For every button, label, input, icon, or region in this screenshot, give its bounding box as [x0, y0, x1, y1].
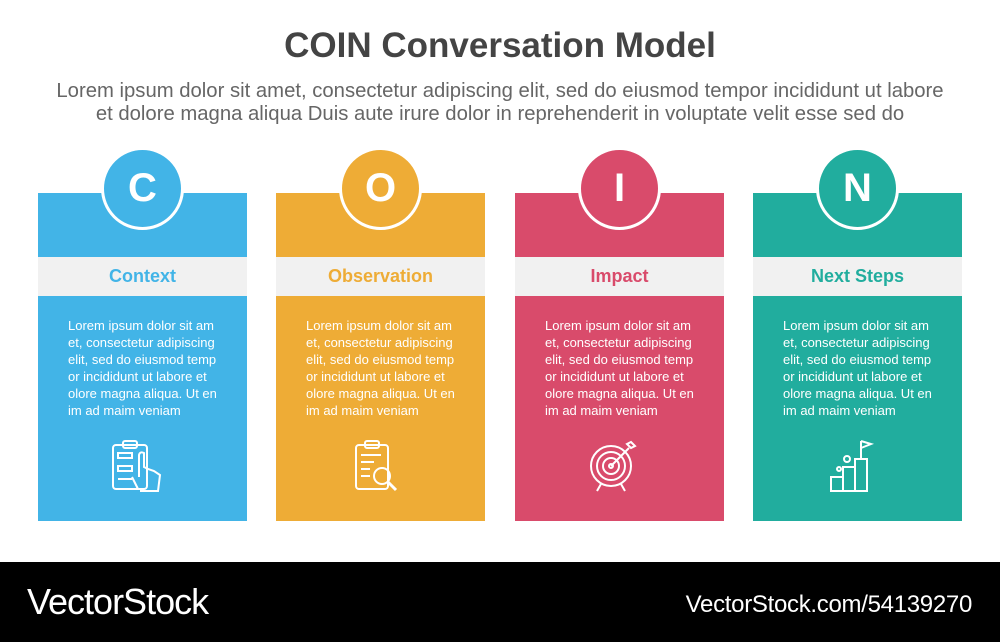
label: Next Steps: Next Steps: [811, 266, 904, 286]
circle: N: N: [843, 166, 872, 210]
text block: et, consectetur adipiscing: [68, 335, 215, 350]
panel: Impact: [515, 193, 724, 521]
text block: im ad maim veniam: [783, 403, 896, 418]
text block: or incididunt ut labore et: [68, 369, 207, 384]
text block: et, consectetur adipiscing: [545, 335, 692, 350]
label: Impact: [515, 257, 724, 296]
text block: [545, 318, 694, 418]
text block: Lorem ipsum dolor sit am: [545, 318, 691, 333]
icon: clipboard magnifier: [355, 440, 397, 491]
panel: Observation: [276, 193, 485, 521]
subtitle: et dolore magna aliqua Duis aute irure dolor in reprehenderit in voluptate velit esse sed do: [96, 103, 904, 125]
icon: target: [590, 440, 637, 492]
text block: olore magna aliqua. Ut en: [783, 386, 932, 401]
text block: or incididunt ut labore et: [306, 369, 445, 384]
text block: elit, sed do eiusmod temp: [545, 352, 693, 367]
text block: olore magna aliqua. Ut en: [545, 386, 694, 401]
circle: O: O: [365, 166, 396, 210]
circle: C: C: [128, 166, 157, 210]
panel: Context: [38, 193, 247, 521]
circle: I: [578, 147, 661, 230]
text block: im ad maim veniam: [68, 403, 181, 418]
footer id: VectorStock.com/54139270: [686, 591, 972, 618]
icon: clipboard hand: [112, 440, 162, 492]
footer bar: [0, 562, 1000, 642]
text block: Lorem ipsum dolor sit am: [783, 318, 929, 333]
text block: elit, sed do eiusmod temp: [306, 352, 454, 367]
circle: O: [339, 147, 422, 230]
label: Observation: [276, 257, 485, 296]
label: Observation: Observation: [328, 266, 433, 286]
footer logo: VectorStock: [27, 581, 208, 622]
title: COIN Conversation Model: [284, 26, 716, 65]
label: Context: [38, 257, 247, 296]
subtitle: Lorem ipsum dolor sit amet, consectetur adipiscing elit, sed do eiusmod tempor incididunt ut labore: [56, 80, 944, 102]
text block: elit, sed do eiusmod temp: [783, 352, 931, 367]
label: Impact: Impact: [590, 266, 649, 286]
circle: N: [816, 147, 899, 230]
text block: et, consectetur adipiscing: [306, 335, 453, 350]
circle: I: I: [614, 166, 625, 210]
label: Context: Context: [109, 266, 176, 286]
panel: Next Steps: [753, 193, 962, 521]
circle: C: [101, 147, 184, 230]
text block: et, consectetur adipiscing: [783, 335, 930, 350]
text block: olore magna aliqua. Ut en: [68, 386, 217, 401]
text block: elit, sed do eiusmod temp: [68, 352, 216, 367]
text block: or incididunt ut labore et: [545, 369, 684, 384]
text block: olore magna aliqua. Ut en: [306, 386, 455, 401]
subtitle: [56, 80, 944, 125]
text block: [306, 318, 455, 418]
text block: or incididunt ut labore et: [783, 369, 922, 384]
text block: [68, 318, 217, 418]
text block: im ad maim veniam: [306, 403, 419, 418]
icon: steps flag: [830, 440, 874, 492]
text block: [783, 318, 932, 418]
label: Next Steps: [753, 257, 962, 296]
text block: Lorem ipsum dolor sit am: [306, 318, 452, 333]
text block: Lorem ipsum dolor sit am: [68, 318, 214, 333]
text block: im ad maim veniam: [545, 403, 658, 418]
